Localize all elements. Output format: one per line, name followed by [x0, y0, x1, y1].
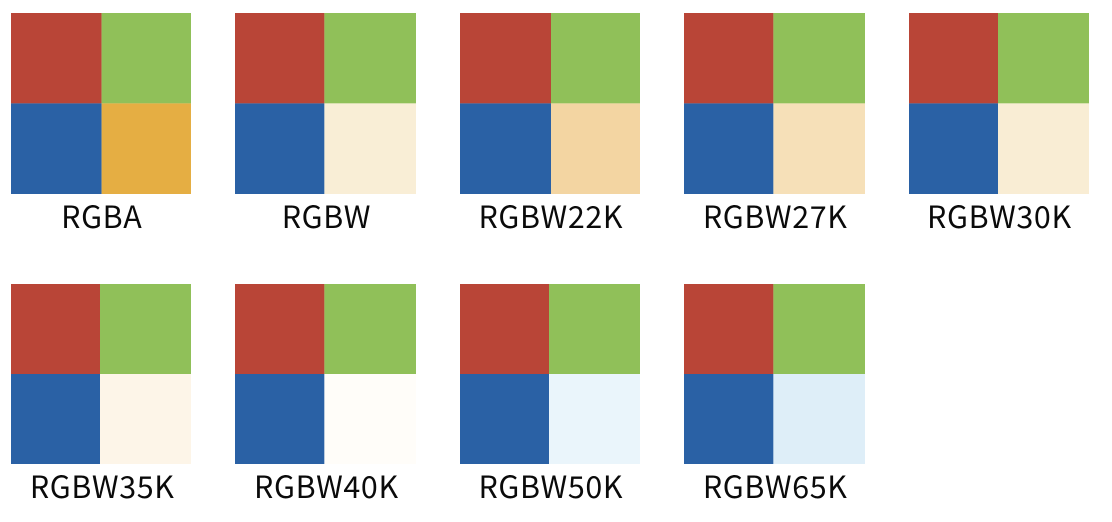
swatch: RGBW — [235, 13, 416, 194]
swatch: RGBW35K — [11, 284, 191, 464]
swatch: RGBA — [11, 13, 191, 194]
swatch: RGBW22K — [460, 13, 640, 194]
label: RGBW30K: RGBW30K — [927, 193, 1072, 237]
swatch: RGBW30K — [909, 13, 1089, 194]
label: RGBW35K: RGBW35K — [30, 463, 175, 507]
label: RGBW40K: RGBW40K — [254, 463, 399, 507]
label: RGBW: RGBW — [282, 193, 371, 237]
label: RGBW50K: RGBW50K — [478, 463, 623, 507]
swatch: RGBW27K — [684, 13, 865, 194]
swatch: RGBW40K — [235, 284, 416, 464]
swatch: RGBW50K — [460, 284, 640, 464]
label: RGBW65K: RGBW65K — [703, 463, 848, 507]
label: RGBW27K: RGBW27K — [703, 193, 848, 237]
label: RGBW22K: RGBW22K — [478, 193, 623, 237]
swatch: RGBW65K — [684, 284, 865, 464]
label: RGBA: RGBA — [61, 193, 142, 237]
